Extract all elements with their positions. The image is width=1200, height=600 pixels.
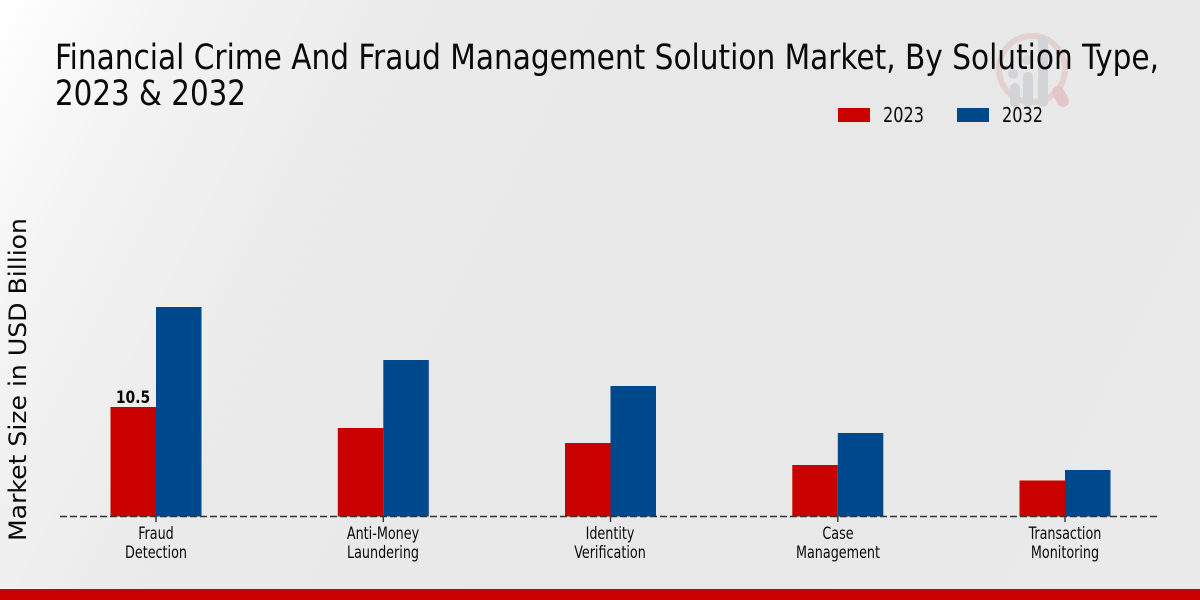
y axis label: Market Size in USD Billion: [4, 218, 32, 541]
title: Financial Crime And Fraud Management Solution Market, By Solution Type,: [55, 38, 1159, 78]
label: Fraud Detection: Fraud: [138, 524, 174, 543]
label: Transaction Monitoring: Monitoring: [1031, 543, 1099, 562]
watermark logo: [999, 36, 1065, 102]
label: Fraud Detection: Detection: [125, 543, 187, 562]
x axis baseline: [60, 516, 1160, 522]
group: Case Management: [792, 433, 883, 516]
label: Anti-Money Laundering: Anti-Money: [347, 524, 419, 543]
bottom bar: [0, 589, 1200, 600]
bar chart: [110, 307, 1110, 516]
label: Identity Verification: Identity: [586, 524, 634, 543]
group: Identity Verification: [565, 386, 656, 516]
x axis labels: [125, 524, 1101, 562]
group: Fraud Detection: [110, 307, 202, 516]
legend 2032: 2032: [1002, 103, 1043, 127]
legend 2032: [957, 103, 1043, 127]
label: Identity Verification: Verification: [574, 543, 646, 562]
legend 2023: [838, 103, 924, 127]
title: 2023 & 2032: [55, 74, 246, 114]
title: [55, 38, 1159, 114]
legend 2023: 2023: [883, 103, 924, 127]
value label: 10.5: [116, 388, 150, 407]
label: Case Management: Management: [796, 543, 881, 562]
legend: [838, 103, 1043, 127]
label: Case Management: Case: [822, 524, 854, 543]
label: Anti-Money Laundering: Laundering: [347, 543, 419, 562]
group: Anti-Money Laundering: [338, 360, 429, 516]
label: Transaction Monitoring: Transaction: [1029, 524, 1101, 543]
group: Transaction Monitoring: [1020, 470, 1110, 516]
